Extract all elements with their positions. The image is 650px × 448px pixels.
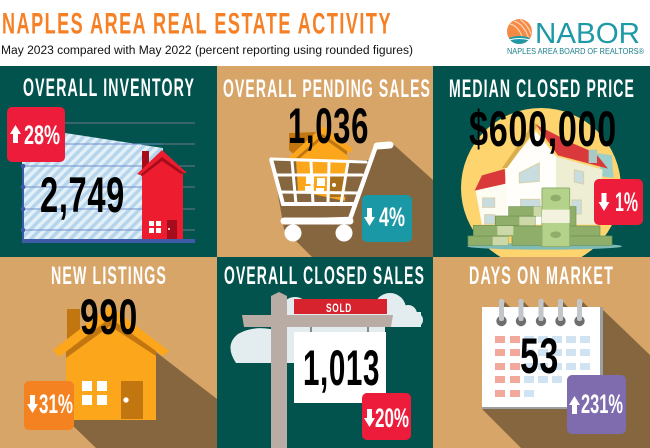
badge: down 20% xyxy=(362,393,411,440)
value: 1,013: 1,013 xyxy=(303,340,380,396)
badge: up 231%: 231% xyxy=(581,389,623,419)
panel: overall closed sales xyxy=(217,257,433,448)
heading: overall pending sales: OVERALL PENDING SALES xyxy=(223,75,431,103)
icon: red house xyxy=(137,150,187,239)
icon: sold sign post xyxy=(242,292,393,448)
value: 53: 53 xyxy=(520,328,559,384)
badge: down 31% xyxy=(24,381,74,430)
subtitle: May 2023 compared with May 2022 (percent reporting using rounded figures) xyxy=(1,45,413,57)
heading: new listings: NEW LISTINGS xyxy=(51,262,167,290)
icon: calendar xyxy=(482,299,650,448)
panel: new listings xyxy=(0,257,217,448)
icon: house and money stacks xyxy=(461,108,622,268)
value: 1,036: 1,036 xyxy=(288,98,369,154)
area chart xyxy=(21,123,195,243)
badge: down 4% xyxy=(362,195,412,242)
title: NAPLES AREA REAL ESTATE ACTIVITY xyxy=(2,8,392,40)
badge: up 231% xyxy=(567,375,626,434)
heading: overall closed sales: OVERALL CLOSED SALES xyxy=(224,262,425,290)
badge: down 31%: 31% xyxy=(39,389,73,419)
value: 2,749: 2,749 xyxy=(40,167,125,223)
panel: overall inventory xyxy=(0,66,217,257)
badge: down 20%: 20% xyxy=(375,403,409,433)
icon: shopping cart with house xyxy=(271,126,433,257)
icon: sold sign post: SOLD xyxy=(326,301,352,315)
logo: NABOR: NABOR xyxy=(535,18,640,50)
badge: up 28%: 28% xyxy=(24,120,60,150)
badge: down 4%: 4% xyxy=(379,202,405,232)
value: 990: 990 xyxy=(80,289,138,345)
icon: orange house xyxy=(53,306,217,448)
panel: days on market xyxy=(433,257,650,448)
heading: overall inventory: OVERALL INVENTORY xyxy=(23,74,195,102)
logo: NABOR xyxy=(507,18,644,56)
panel: overall pending sales xyxy=(217,66,433,257)
icon: clouds xyxy=(230,293,423,363)
badge: down 1% xyxy=(594,179,643,225)
badge: up 28% xyxy=(7,107,65,162)
panel: median closed price xyxy=(433,66,650,268)
